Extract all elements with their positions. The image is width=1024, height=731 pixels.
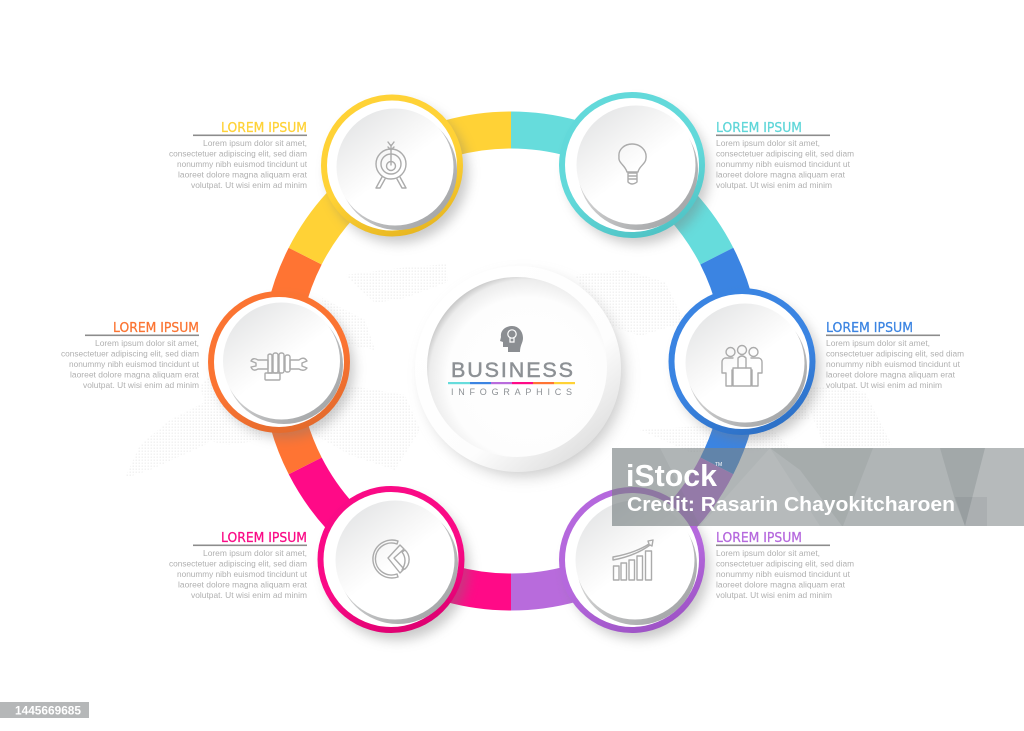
icon: wrench in fist <box>251 353 307 380</box>
text block: cyan: consectetuer adipiscing elit, sed diam <box>716 148 854 158</box>
icon: head with bulb <box>500 326 523 352</box>
text block: cyan: LOREM IPSUM <box>716 121 802 136</box>
text block: yellow <box>169 121 308 190</box>
text block: pink: LOREM IPSUM <box>221 531 307 546</box>
text block: orange: nonummy nibh euismod tincidunt ut <box>69 359 200 369</box>
text block: yellow: laoreet dolore magna aliquam erat <box>178 170 308 180</box>
text block: pink: laoreet dolore magna aliquam erat <box>178 580 308 590</box>
central badge <box>415 266 623 475</box>
text block: purple: nonummy nibh euismod tincidunt ut <box>716 569 851 579</box>
icon: rising bar chart <box>613 540 653 580</box>
text block: blue: laoreet dolore magna aliquam erat <box>826 370 956 380</box>
subtitle: infographics: INFOGRAPHICS <box>451 387 572 397</box>
text block: purple: volutpat. Ut wisi enim ad minim <box>716 590 832 600</box>
text block: orange: consectetuer adipiscing elit, sed diam <box>61 348 199 358</box>
icon: three people at a desk <box>722 346 762 386</box>
text block: orange: Lorem ipsum dolor sit amet, <box>95 338 199 348</box>
text block: orange: volutpat. Ut wisi enim ad minim <box>83 380 199 390</box>
text block: cyan: laoreet dolore magna aliquam erat <box>716 170 846 180</box>
title: business: BUSINESS <box>451 358 573 382</box>
text block: cyan <box>716 121 854 190</box>
text block: purple: consectetuer adipiscing elit, sed diam <box>716 558 854 568</box>
node: orange <box>208 291 354 438</box>
text block: blue: Lorem ipsum dolor sit amet, <box>826 338 930 348</box>
node: purple <box>559 487 709 639</box>
image id tag <box>0 702 89 718</box>
text block: cyan: nonummy nibh euismod tincidunt ut <box>716 159 851 169</box>
text block: yellow: Lorem ipsum dolor sit amet, <box>203 138 307 148</box>
text block: yellow: volutpat. Ut wisi enim ad minim <box>191 180 307 190</box>
text block: cyan: volutpat. Ut wisi enim ad minim <box>716 180 832 190</box>
text block: yellow: LOREM IPSUM <box>221 121 307 136</box>
watermark credit: Credit: Rasarin Chayokitcharoen <box>627 494 955 516</box>
rainbow divider <box>448 382 575 384</box>
watermark logo: iStock <box>626 458 718 493</box>
text block: purple: Lorem ipsum dolor sit amet, <box>716 548 820 558</box>
text block: blue: volutpat. Ut wisi enim ad minim <box>826 380 942 390</box>
text block: yellow: nonummy nibh euismod tincidunt ut <box>177 159 308 169</box>
text block: blue: consectetuer adipiscing elit, sed diam <box>826 348 964 358</box>
text block: blue <box>826 321 964 390</box>
dotted world map background <box>125 264 892 478</box>
node: yellow <box>321 94 468 243</box>
text block: cyan: Lorem ipsum dolor sit amet, <box>716 138 820 148</box>
text block: blue: LOREM IPSUM <box>826 321 913 336</box>
text block: purple: LOREM IPSUM <box>716 531 802 546</box>
image id tag: 1445669685 <box>15 704 81 718</box>
node: blue <box>668 288 820 441</box>
text block: pink: volutpat. Ut wisi enim ad minim <box>191 590 307 600</box>
node: cyan <box>559 92 709 244</box>
text block: purple: laoreet dolore magna aliquam erat <box>716 580 846 590</box>
watermark trademark: TM <box>715 462 722 468</box>
text block: orange <box>61 321 200 390</box>
text block: pink: nonummy nibh euismod tincidunt ut <box>177 569 308 579</box>
icon: target with arrow <box>376 142 406 188</box>
text block: purple <box>716 531 854 600</box>
text block: pink: Lorem ipsum dolor sit amet, <box>203 548 307 558</box>
watermark banner <box>612 448 1024 526</box>
icon: pie chart <box>373 540 409 578</box>
icon: light bulb <box>619 144 646 184</box>
text block: orange: laoreet dolore magna aliquam erat <box>70 370 200 380</box>
text block: pink: consectetuer adipiscing elit, sed diam <box>169 558 307 568</box>
text block: yellow: consectetuer adipiscing elit, sed diam <box>169 148 307 158</box>
text block: orange: LOREM IPSUM <box>113 321 199 336</box>
segmented circular ring <box>280 130 742 592</box>
node: pink <box>318 486 469 640</box>
text block: pink <box>169 531 308 600</box>
text block: blue: nonummy nibh euismod tincidunt ut <box>826 359 961 369</box>
